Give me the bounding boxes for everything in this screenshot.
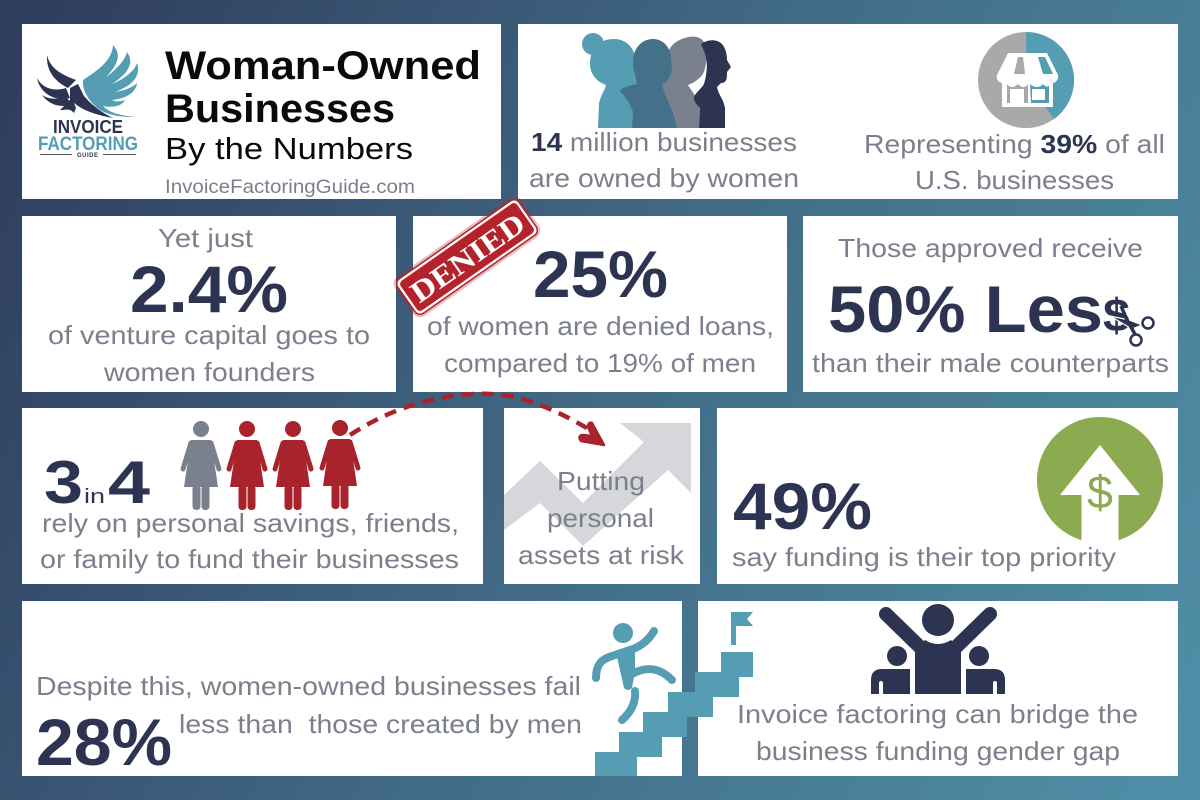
icon: red woman 3 [322,420,358,509]
stat: 3 in 4 [44,449,151,516]
stairs [595,652,753,776]
title: Woman-Owned [165,44,481,88]
title [165,44,481,131]
stat: 50 percent less: 50% Les [828,272,1103,346]
text: invoice factoring: Invoice factoring can bridge the [737,699,1138,729]
stat: 3 in 4: 4 [108,449,151,516]
stat: 25 percent: 25% [533,237,668,311]
icon: store pie chart 39 percent [978,32,1074,128]
text: funding top priority: say funding is their top priority [732,542,1116,572]
text: putting personal assets at risk: Putting [557,466,645,496]
stat: 3 in 4: 3 [44,449,83,516]
stat: 49 percent: 49% [733,469,872,543]
flag [731,612,753,645]
subtitle: By the Numbers [165,131,413,166]
text: male counterparts: than their male counterparts [812,348,1169,378]
icon: four women silhouettes [582,33,731,128]
logo teal wing [83,45,138,117]
icon: red woman 2 [275,421,311,510]
panel: title and logo [22,24,501,199]
text: venture capital: women founders [103,357,315,387]
icon: dollar sign and scissors: $ [1103,289,1130,341]
logo word INVOICE: INVOICE [53,117,123,137]
text: venture capital: of venture capital goes to [48,320,370,350]
icon: red woman 1 [229,421,265,510]
text: less than men: less than those created by men [179,709,582,739]
text: representing 39 percent [864,129,1165,195]
panel: personal assets at risk [504,408,700,584]
text: rely on personal savings: or family to fund their businesses [40,544,459,574]
logo dark wing [37,55,113,118]
stat: 28 percent: 28% [36,705,172,779]
text: rely on personal savings: rely on personal savings, friends, [42,508,459,538]
text: rely on personal savings [40,508,459,574]
text: 14 million businesses [529,127,799,193]
logo word FACTORING: FACTORING [38,134,138,155]
text: invoice factoring [737,699,1138,766]
logo: Invoice Factoring Guide [37,45,138,159]
text: putting personal assets at risk [518,466,685,570]
text: representing 39 percent: U.S. businesses [915,165,1114,195]
logo word GUIDE: GUIDE [77,153,98,159]
icon: group celebrating [871,604,1005,694]
text: denied loans [427,311,774,378]
text: denied loans: of women are denied loans, [427,311,774,341]
text: yet just: Yet just [158,223,254,253]
panel: approved receive 50 percent less [803,216,1178,392]
website: InvoiceFactoringGuide.com [165,177,415,198]
icon: green dollar up arrow [1037,417,1163,540]
text: denied loans: compared to 19% of men [444,348,756,378]
panel: funding top priority [717,408,1178,584]
icon: grey woman [183,421,219,510]
icon: dollar sign and scissors [1103,289,1154,346]
icon: green dollar up arrow: $ [1087,466,1113,518]
text: 14 million businesses: 14 million businesses [531,127,797,157]
panel: 3 in 4 [22,408,483,584]
icon: runner on stairs with flag [595,612,753,776]
panel: invoice factoring bridge [698,601,1178,776]
panel: 14 million businesses and 39 percent [518,24,1178,199]
stat: 2.4 percent: 2.4% [130,252,288,326]
text: despite this: Despite this, women-owned businesses fail [36,671,581,701]
stat: 3 in 4: in [84,486,105,508]
arrow: dashed red curve [350,394,604,445]
icon: grey rising arrow [504,423,691,546]
text: putting personal assets at risk: personal [547,503,654,533]
runner [596,623,672,720]
text: venture capital [48,320,370,387]
panel: venture capital 2.4 percent [22,216,396,392]
panel: fail less [22,601,682,779]
panel: loans denied 25 percent [390,193,787,392]
icon: denied stamp [390,193,544,321]
text: 14 million businesses: are owned by women [529,163,799,193]
text: those approved receive: Those approved receive [838,233,1143,263]
text: representing 39 percent: Representing 39% of all [864,129,1165,159]
icon: denied stamp: DENIED [404,207,531,310]
text: putting personal assets at risk: assets at risk [518,540,685,570]
text: invoice factoring: business funding gender gap [756,736,1120,766]
title: Businesses [165,87,395,131]
